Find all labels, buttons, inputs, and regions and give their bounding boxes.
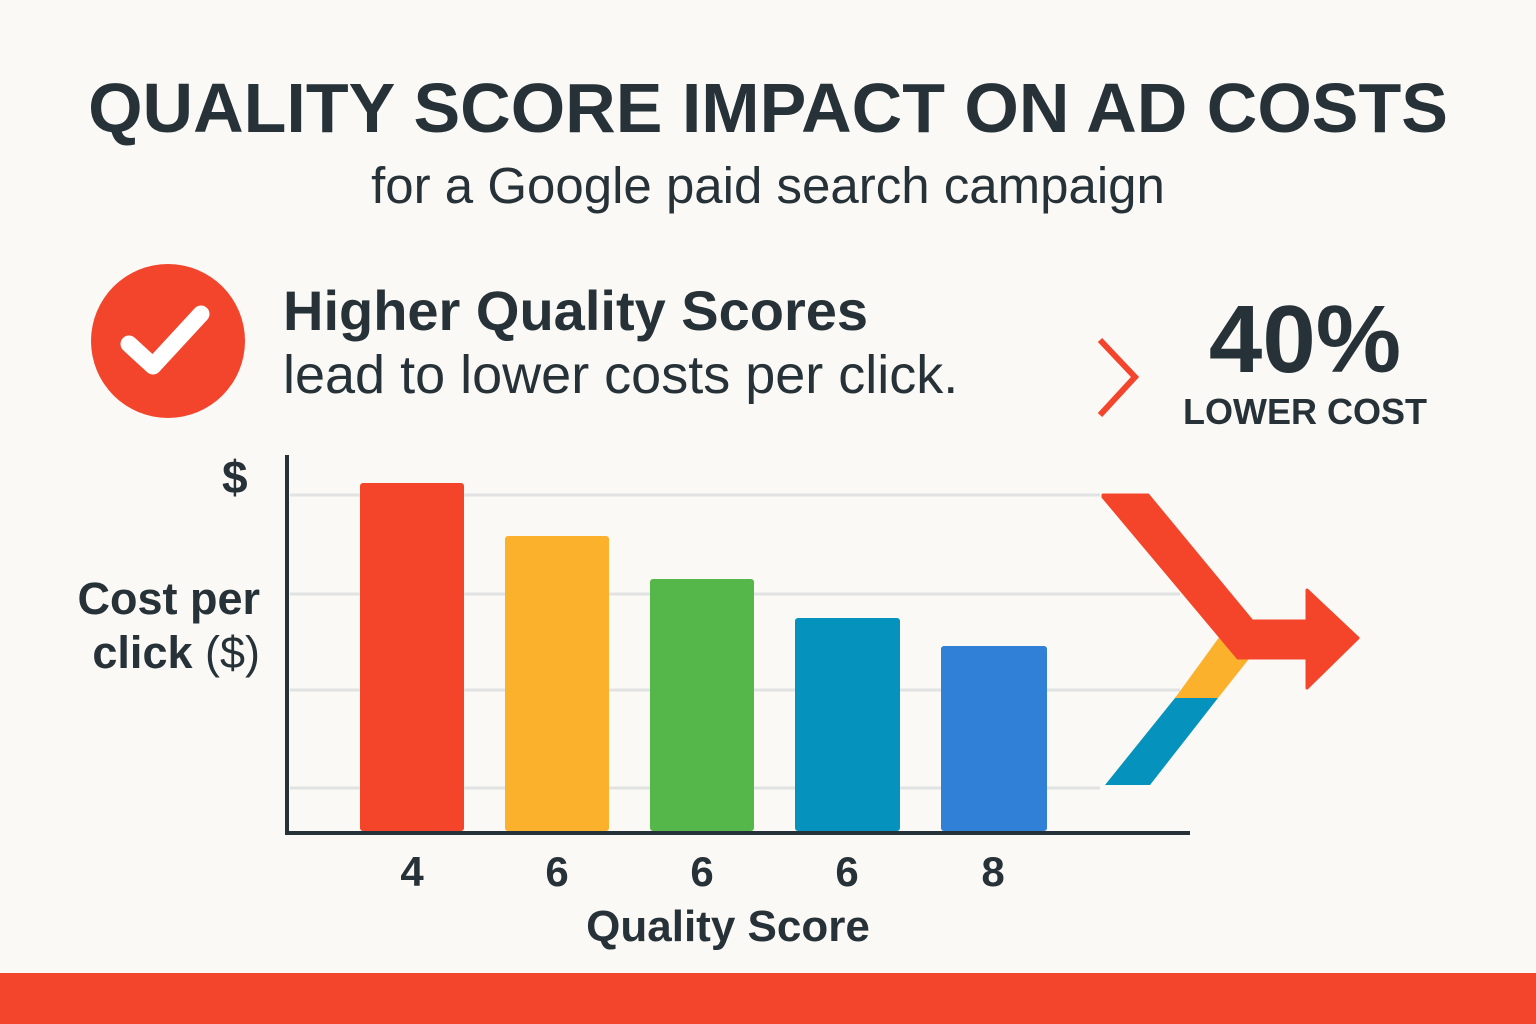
headline text: lead to lower costs per click. bbox=[283, 345, 958, 405]
headline text: Higher Quality Scores bbox=[283, 279, 868, 342]
y-axis label: Cost per bbox=[77, 573, 260, 624]
bar chart: 6 bbox=[690, 848, 714, 895]
stat: 40% lower cost bbox=[1183, 286, 1427, 432]
bar chart: 6 bbox=[545, 848, 569, 895]
stat: 40% lower cost: LOWER COST bbox=[1183, 391, 1427, 432]
bar chart: 8 bbox=[981, 848, 1005, 895]
footer bar bbox=[0, 973, 1536, 1024]
y-axis label: click ($) bbox=[92, 627, 260, 678]
headline text bbox=[283, 279, 958, 405]
bar chart: 6 bbox=[835, 848, 859, 895]
icon: chevron bbox=[1098, 338, 1139, 417]
stat: 40% lower cost: 40% bbox=[1209, 286, 1401, 393]
dollar sign: $ bbox=[222, 451, 248, 503]
subtitle: for a Google paid search campaign bbox=[371, 157, 1165, 214]
icon: check circle bbox=[91, 264, 245, 418]
y-axis label bbox=[77, 573, 260, 678]
bar chart: 4 bbox=[400, 848, 424, 895]
x-axis label: Quality Score bbox=[586, 902, 870, 951]
title: QUALITY SCORE IMPACT ON AD COSTS bbox=[88, 69, 1448, 147]
